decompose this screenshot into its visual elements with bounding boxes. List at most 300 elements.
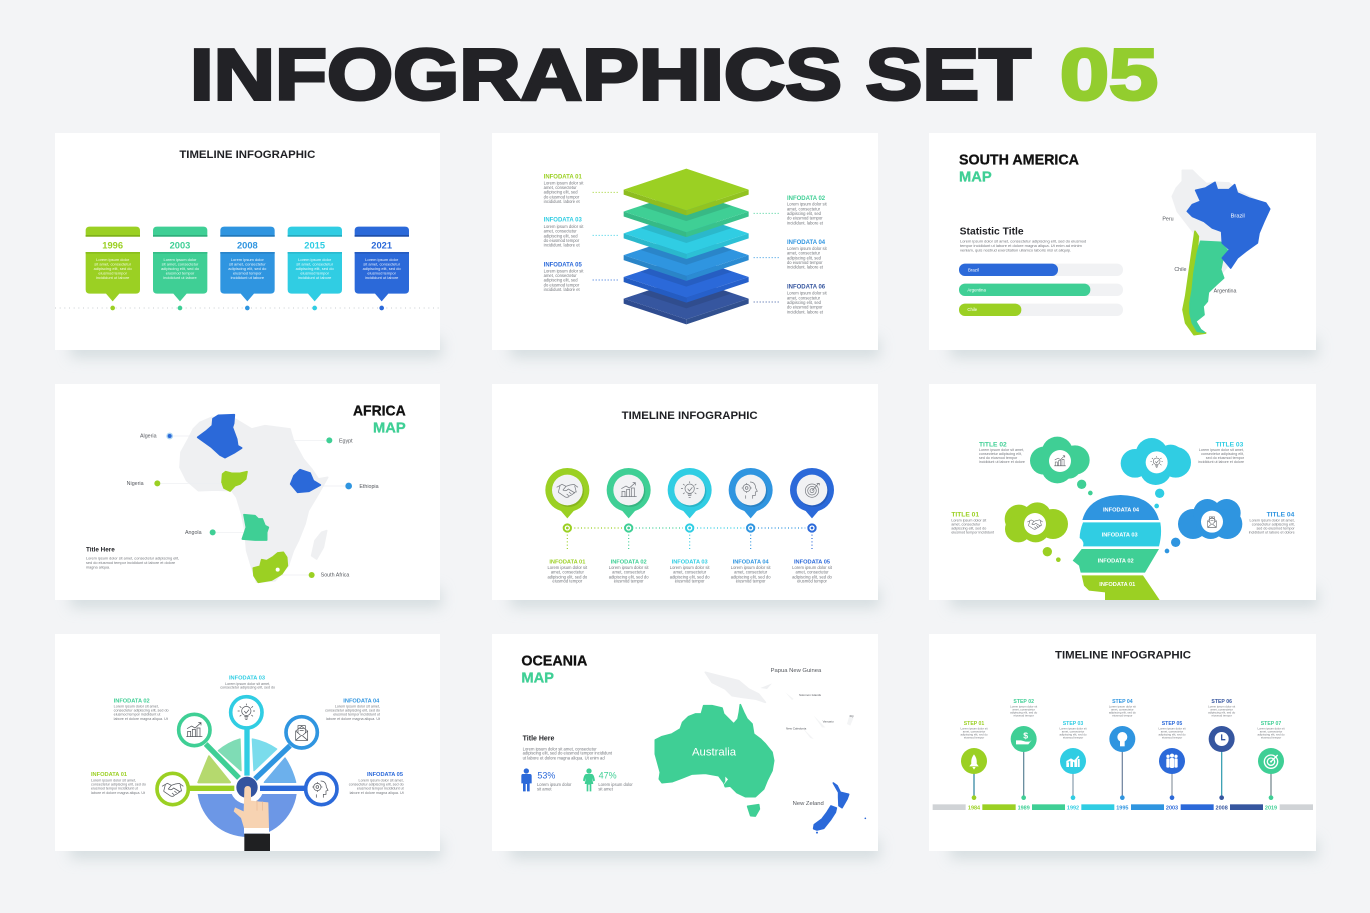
bar: brazil	[959, 264, 1123, 276]
step 04: eiusmod tempor	[1112, 714, 1133, 718]
panel: timeline cards	[55, 133, 440, 350]
card 2021: eiusmod tempor	[367, 271, 397, 276]
step 02: eiusmod tempor	[1014, 714, 1034, 718]
card 1996: sit amet, consectetur	[94, 262, 132, 267]
label: title 01: amet, consectetur	[951, 523, 981, 527]
step 06: adipiscing elit, sed do	[1208, 711, 1236, 715]
step 05: amet, consectetur	[795, 570, 829, 575]
step 05: amet, consectetur	[1161, 730, 1183, 734]
hand	[234, 786, 270, 851]
card 2021: adipiscing elit, sed do	[363, 266, 401, 271]
step 06	[1208, 699, 1236, 800]
marker: algeria	[140, 433, 195, 440]
label: title 03: TITLE 03	[1216, 441, 1244, 448]
step 01	[545, 468, 589, 584]
head: infodata 04	[1082, 495, 1159, 520]
year bar: 2003	[1166, 805, 1178, 811]
label: infodata 05: eiusmod tempor incididunt ut	[357, 787, 404, 791]
label: infodata 03: do eiusmod tempor	[544, 238, 580, 243]
label: title 03: Lorem ipsum dolor sit amet,	[1199, 448, 1244, 452]
label: infodata 03: incididunt. labore et	[544, 243, 581, 248]
step 04	[729, 468, 773, 584]
card 2003: 2003	[170, 240, 190, 250]
stat: male: Lorem ipsum dolor	[537, 782, 572, 787]
text block: Lorem ipsum dolor sit amet, consectetur adipiscing elit,	[86, 557, 179, 561]
step 03: Lorem ipsum dolor sit	[670, 565, 710, 570]
label: infodata 04: do eiusmod tempor	[787, 260, 823, 265]
bar: chile	[959, 304, 1123, 316]
step 01: STEP 01	[964, 721, 984, 727]
card 2008: Lorem ipsum dolor	[231, 257, 265, 262]
step 04: amet, consectetur	[734, 570, 768, 575]
label: infodata 04	[754, 240, 828, 270]
marker: algeria: Algeria	[140, 434, 157, 440]
heading: TIMELINE INFOGRAPHIC	[1055, 650, 1191, 662]
spoke 05	[260, 773, 337, 805]
label: title 04: Lorem ipsum dolor sit amet,	[1250, 518, 1295, 522]
card 2008: incididunt ut labore	[231, 275, 265, 280]
text block: Title Here	[523, 736, 554, 743]
card 2021: Lorem ipsum dolor	[365, 257, 399, 262]
panel: africa map	[55, 384, 440, 600]
step 01: adipiscing elit, sed do	[960, 733, 988, 737]
label: title 02: sed do eiusmod tempor	[979, 456, 1018, 460]
label: infodata 05: incididunt. labore et	[544, 287, 581, 292]
step 01: amet, consectetur	[551, 570, 584, 575]
label: infodata 01: Lorem ipsum dolor sit amet,	[91, 778, 136, 782]
label: infodata 05: Lorem ipsum dolor sit amet,	[359, 778, 404, 782]
year bar: 1984	[968, 805, 981, 811]
label: title 02: TITLE 02	[979, 441, 1007, 448]
label: infodata 05: Lorem ipsum dolor sit	[544, 268, 584, 273]
step 04: INFODATA 04	[733, 559, 770, 565]
label: title 01	[951, 512, 994, 535]
card 2008: eiusmod tempor	[233, 271, 262, 276]
head: infodata 02: INFODATA 02	[1098, 559, 1134, 565]
step 07: STEP 07	[1261, 721, 1281, 727]
step 05: INFODATA 05	[794, 559, 830, 565]
marker: egypt	[292, 437, 353, 444]
marker: south africa	[282, 572, 349, 579]
cloud: green	[1005, 502, 1068, 562]
step 03	[1059, 721, 1087, 800]
stat: male: sit amet	[537, 786, 552, 791]
step 04: adipiscing elit, sed do	[731, 574, 771, 579]
marker: egypt: Egypt	[339, 438, 353, 444]
step 03: STEP 03	[1063, 721, 1083, 727]
map: africa	[180, 415, 328, 582]
card 2003: Lorem ipsum dolor	[163, 257, 197, 262]
label: infodata 04: consectetur adipiscing elit, sed do	[325, 709, 380, 713]
label: title 04	[1249, 512, 1295, 535]
card 1996: eiusmod tempor	[98, 271, 128, 276]
card 2021: incididunt ut labore	[365, 275, 399, 280]
label: infodata 04	[325, 698, 380, 721]
map: south america	[1162, 170, 1270, 335]
label: infodata 05	[544, 262, 619, 292]
text block: magna aliqua.	[86, 565, 110, 569]
step 02: amet, consectetur	[1012, 708, 1035, 712]
label: infodata 01	[544, 174, 619, 204]
card 2003: adipiscing elit, sed do	[161, 266, 200, 271]
step 01: amet, consectetur	[963, 730, 985, 734]
step 06: Lorem ipsum dolor sit	[1208, 705, 1235, 709]
step 05: STEP 05	[1162, 721, 1182, 727]
card 2021	[355, 227, 409, 310]
label: infodata 02: adipiscing elit, sed	[787, 211, 822, 216]
label: infodata 01: eiusmod tempor incididunt ut	[91, 787, 138, 791]
card 1996: adipiscing elit, sed do	[94, 266, 132, 271]
card 2021: 2021	[371, 240, 392, 250]
heading: SOUTH AMERICA	[959, 152, 1079, 168]
label: infodata 01: INFODATA 01	[544, 174, 582, 180]
step 05: Lorem ipsum dolor sit	[792, 565, 833, 570]
label: infodata 03: consectetur adipiscing elit, sed do	[220, 686, 275, 690]
title: INFOGRAPHICS SET	[190, 36, 1031, 116]
step 05: adipiscing elit, sed do	[1158, 733, 1186, 737]
label: infodata 04: INFODATA 04	[787, 240, 826, 246]
card 2003: eiusmod tempor	[166, 271, 195, 276]
card 2015: incididunt ut labore	[298, 275, 332, 280]
card 2008: sit amet, consectetur	[229, 262, 266, 267]
heading	[353, 403, 406, 437]
heading	[521, 653, 587, 687]
label: infodata 02	[114, 698, 169, 721]
label: title 01: eiusmod tempor incididunt	[951, 531, 994, 535]
step 05: eiusmod tempor	[1162, 736, 1182, 740]
heading: MAP	[959, 170, 992, 186]
label: infodata 02: labore et dolore magna aliqua. Ut	[114, 717, 168, 721]
step 07	[1257, 721, 1285, 800]
card 2003: sit amet, consectetur	[162, 262, 199, 267]
step 02: adipiscing elit, sed do	[609, 574, 649, 579]
label: title 04: TITLE 04	[1267, 512, 1295, 519]
step 04: Lorem ipsum dolor sit	[1109, 705, 1136, 709]
spoke 02	[179, 714, 239, 778]
step 04: STEP 04	[1112, 699, 1133, 705]
label: infodata 01: adipiscing elit, sed	[544, 190, 578, 195]
label: infodata 04: Lorem ipsum dolor sit	[787, 246, 828, 251]
cloud: teal	[1030, 437, 1093, 495]
step 01: Lorem ipsum dolor sit	[960, 727, 988, 731]
label: infodata 02: consectetur adipiscing elit, sed do	[114, 709, 169, 713]
label: title 03: sed do eiusmod tempor	[1206, 456, 1245, 460]
text block: Title Here	[86, 546, 115, 553]
marker: south africa: South Africa	[321, 573, 349, 579]
marker: nigeria	[127, 480, 222, 487]
step 02	[1010, 699, 1038, 800]
statistic text: tempor incididunt ut labore et dolore magna aliqua. Ut enim ad minim	[960, 243, 1082, 248]
head: infodata 04: INFODATA 04	[1103, 507, 1140, 513]
step 01: Lorem ipsum dolor sit	[547, 565, 588, 570]
card 2008: adipiscing elit, sed do	[228, 266, 267, 271]
label: infodata 01: INFODATA 01	[91, 772, 127, 778]
title: 05	[1060, 36, 1158, 116]
card 1996	[86, 227, 140, 310]
step 07: adipiscing elit, sed do	[1257, 733, 1285, 737]
marker: angola: Angola	[185, 530, 202, 536]
step 04: Lorem ipsum dolor sit	[731, 565, 771, 570]
heading: OCEANIA	[521, 653, 587, 669]
map: south america: Peru	[1162, 217, 1174, 223]
head: infodata 01	[1082, 575, 1160, 600]
label: title 01: TITLE 01	[951, 512, 979, 519]
label: infodata 02: INFODATA 02	[787, 196, 826, 202]
label: infodata 01: amet, consectetur	[544, 185, 577, 190]
label: title 04: consectetur adipiscing elit,	[1252, 523, 1295, 527]
label: infodata 05: INFODATA 05	[544, 262, 582, 268]
connector dots	[574, 526, 805, 530]
card 1996: Lorem ipsum dolor	[96, 257, 130, 262]
label: infodata 04: Lorem ipsum dolor sit amet,	[335, 705, 380, 709]
label: infodata 06: amet, consectetur	[787, 295, 821, 300]
statistic text: Lorem ipsum dolor sit amet, consectetur adipiscing elit, sed do eiusmod	[960, 239, 1086, 244]
label: infodata 03	[220, 675, 275, 690]
label: infodata 06	[754, 284, 828, 314]
year bar: 2019	[1265, 805, 1277, 811]
card 2008: 2008	[237, 240, 258, 250]
map: oceania: Vanuatu	[823, 720, 834, 724]
label: infodata 04: adipiscing elit, sed	[787, 255, 822, 260]
label: infodata 01: consectetur adipiscing elit, sed do	[91, 783, 146, 787]
marker: ethiopia: Ethiopia	[359, 484, 379, 490]
label: infodata 03: adipiscing elit, sed	[544, 233, 578, 238]
step 02	[607, 468, 651, 584]
heading	[959, 152, 1079, 186]
step 03: amet, consectetur	[673, 570, 707, 575]
step 03: Lorem ipsum dolor sit	[1059, 727, 1087, 731]
step 03: INFODATA 03	[672, 559, 708, 565]
panel drop shadows	[70, 338, 1318, 859]
card 2015	[288, 227, 342, 310]
dotted axis	[55, 306, 440, 309]
heading: MAP	[521, 671, 554, 687]
bar: argentina: Argentina	[967, 288, 986, 293]
label: infodata 06: do eiusmod tempor	[787, 305, 823, 310]
card 2015: sit amet, consectetur	[296, 262, 334, 267]
card 1996: incididunt ut labore	[96, 275, 130, 280]
map: oceania: New Caledonia	[786, 726, 807, 730]
step 05: adipiscing elit, sed do	[792, 574, 833, 579]
step 07: Lorem ipsum dolor sit	[1257, 727, 1285, 731]
hub	[236, 777, 258, 798]
panel: radial hand diagram	[55, 634, 440, 851]
map: oceania	[655, 668, 866, 834]
map: oceania: Solomon Islands	[799, 693, 822, 697]
step 05: Lorem ipsum dolor sit	[1158, 727, 1186, 731]
step 01: eiusmod tempor	[552, 579, 583, 584]
panel: step timeline	[929, 634, 1316, 851]
stat: male	[521, 768, 572, 791]
map: oceania: Fiji	[850, 714, 854, 718]
step 06: STEP 06	[1211, 699, 1232, 705]
step 06: eiusmod tempor	[1212, 714, 1232, 718]
label: infodata 05: labore et dolore magna aliqua. Ut	[350, 791, 404, 795]
step 03: adipiscing elit, sed do	[670, 574, 710, 579]
heading: TIMELINE INFOGRAPHIC	[622, 410, 758, 422]
step 04: amet, consectetur	[1111, 708, 1134, 712]
spoke 03	[231, 697, 262, 776]
step 04	[1109, 699, 1136, 800]
head: infodata 01: INFODATA 01	[1099, 582, 1135, 588]
step 02: Lorem ipsum dolor sit	[1010, 705, 1037, 709]
step 02: INFODATA 02	[611, 559, 647, 565]
step 01	[960, 721, 988, 800]
bar: chile: Chile	[967, 307, 978, 312]
step 01: eiusmod tempor	[964, 736, 984, 740]
marker: ethiopia	[322, 483, 379, 490]
label: title 04: sed do eiusmod tempor	[1256, 527, 1295, 531]
text block: sed do eiusmod tempor incididunt ut labore et dolore	[86, 561, 175, 565]
label: title 01: Lorem ipsum dolor sit	[951, 518, 986, 522]
card 2015: eiusmod tempor	[300, 271, 330, 276]
heading: MAP	[373, 421, 406, 437]
label: infodata 03	[544, 218, 619, 248]
map: south america: Argentina	[1214, 289, 1237, 295]
card 2015: 2015	[304, 240, 325, 250]
text block	[86, 546, 179, 569]
label: infodata 03: Lorem ipsum dolor sit amet,	[225, 682, 270, 686]
bar: brazil: Brazil	[968, 268, 979, 273]
stat: male: 53%	[537, 771, 555, 781]
label: infodata 03: amet, consectetur	[544, 229, 577, 234]
label: title 03	[1198, 441, 1245, 464]
card 2003: incididunt ut labore	[163, 275, 198, 280]
year bar: 2008	[1216, 805, 1228, 811]
text block: ut labore et dolore magna aliqua. Ut enim ad	[523, 755, 605, 760]
spoke 04	[255, 717, 317, 779]
label: infodata 01: do eiusmod tempor	[544, 194, 580, 199]
panel: head with thought clouds	[929, 384, 1316, 600]
marker: nigeria: Nigeria	[127, 481, 144, 487]
label: infodata 06: adipiscing elit, sed	[787, 300, 822, 305]
label: infodata 05: adipiscing elit, sed	[544, 278, 578, 283]
stat: female: sit amet	[598, 786, 614, 791]
label: title 03: incididunt ut labore et dolore	[1198, 460, 1244, 464]
year bar	[933, 804, 1313, 811]
marker: angola	[185, 529, 243, 536]
heading: AFRICA	[353, 403, 406, 419]
step 03: eiusmod tempor	[675, 579, 705, 584]
pale sectors	[198, 739, 297, 837]
label: infodata 02: incididunt. labore et	[787, 220, 824, 225]
label: title 02: Lorem ipsum dolor sit amet,	[979, 448, 1024, 452]
map: south america: Brazil	[1231, 213, 1245, 219]
label: infodata 03: INFODATA 03	[229, 675, 265, 681]
label: infodata 02: INFODATA 02	[114, 698, 150, 704]
stat: female	[583, 768, 633, 791]
label: infodata 05: amet, consectetur	[544, 273, 577, 278]
card 1996: 1996	[102, 240, 123, 250]
step 05	[1158, 721, 1186, 800]
label: infodata 05	[349, 772, 404, 795]
label: title 02	[979, 441, 1025, 464]
label: infodata 05: INFODATA 05	[367, 772, 403, 778]
map: oceania: Papua New Guinea	[771, 668, 822, 674]
panel: south america map	[929, 133, 1316, 350]
step 04: adipiscing elit, sed do	[1109, 711, 1136, 715]
step 02: $	[1023, 730, 1028, 740]
label: infodata 06: incididunt. labore et	[787, 309, 824, 314]
step 07: eiusmod tempor	[1261, 736, 1281, 740]
label: infodata 04: labore et dolore magna aliqua. Ut	[326, 717, 380, 721]
label: infodata 06: Lorem ipsum dolor sit	[787, 291, 828, 296]
card 2003	[153, 227, 207, 310]
text block	[523, 736, 613, 760]
panel: stacked layers	[492, 133, 878, 350]
panel: oceania map	[492, 634, 878, 851]
label: infodata 04: INFODATA 04	[343, 698, 380, 704]
statistic text	[960, 227, 1086, 252]
year bar: 1995	[1116, 805, 1128, 811]
year bar: 1992	[1067, 805, 1079, 811]
map: south america: Chile	[1174, 267, 1187, 273]
statistic text: Statistic Title	[960, 227, 1024, 238]
step 07: amet, consectetur	[1260, 730, 1282, 734]
panel: pin timeline	[492, 384, 878, 600]
card 2008	[220, 227, 275, 310]
step 03: eiusmod tempor	[1063, 736, 1083, 740]
label: title 02: consectetur adipiscing elit,	[979, 452, 1022, 456]
year bar: 1989	[1018, 805, 1030, 811]
statistic text: veniam, quis nostrud exercitation ullamco laboris nisi ut aliquip.	[960, 247, 1071, 252]
step 03: adipiscing elit, sed do	[1059, 733, 1087, 737]
step 02: eiusmod tempor	[614, 579, 644, 584]
card 2021: sit amet, consectetur	[363, 262, 401, 267]
label: infodata 06: INFODATA 06	[787, 284, 826, 290]
label: infodata 02: Lorem ipsum dolor sit	[787, 202, 828, 207]
step 02: Lorem ipsum dolor sit	[609, 565, 649, 570]
map: oceania: New Zeland	[793, 801, 824, 807]
label: infodata 02: amet, consectetur	[787, 206, 821, 211]
step 04: eiusmod tempor	[736, 579, 766, 584]
stat: female: Lorem ipsum dolor	[598, 782, 633, 787]
card 2015: adipiscing elit, sed do	[296, 266, 334, 271]
card 2015: Lorem ipsum dolor	[298, 257, 332, 262]
heading: TIMELINE INFOGRAPHIC	[179, 149, 316, 161]
label: infodata 01	[91, 772, 146, 795]
label: title 03: consectetur adipiscing elit,	[1201, 452, 1244, 456]
step 01: adipiscing elit, sed do	[547, 574, 588, 579]
step 02: amet, consectetur	[612, 570, 646, 575]
step 02: adipiscing elit, sed do	[1010, 711, 1038, 715]
label: infodata 03: INFODATA 03	[544, 218, 582, 224]
step 05: eiusmod tempor	[797, 579, 828, 584]
map: oceania: Australia	[692, 747, 737, 759]
label: infodata 04: amet, consectetur	[787, 251, 821, 256]
text block: Lorem ipsum dolor sit amet, consectetur	[523, 746, 597, 751]
label: infodata 03: Lorem ipsum dolor sit	[544, 224, 584, 229]
label: infodata 02: Lorem ipsum dolor sit amet,	[114, 705, 159, 709]
step 05	[790, 468, 834, 584]
text block: adipiscing elit, sed do eiusmod tempor incididunt	[523, 751, 613, 756]
label: title 04: incididunt ut labore et dolore	[1249, 531, 1295, 535]
head: infodata 03	[1080, 522, 1161, 546]
step 06: amet, consectetur	[1210, 708, 1233, 712]
label: title 02: incididunt ut labore et dolore	[979, 460, 1025, 464]
step 03	[668, 468, 712, 584]
label: infodata 04: incididunt. labore et	[787, 265, 824, 270]
label: infodata 02: eiusmod tempor incididunt ut	[114, 713, 160, 717]
label: infodata 02: do eiusmod tempor	[787, 216, 823, 221]
cloud: cyan	[1121, 438, 1191, 508]
stat: female: 47%	[599, 771, 617, 781]
step 02: STEP 02	[1013, 699, 1034, 705]
label: title 01: adipiscing elit, sed do	[951, 527, 986, 531]
label: infodata 05: consectetur adipiscing elit, sed do	[349, 783, 404, 787]
label: infodata 04: eiusmod tempor incididunt ut	[333, 713, 380, 717]
step 01: INFODATA 01	[549, 559, 585, 565]
